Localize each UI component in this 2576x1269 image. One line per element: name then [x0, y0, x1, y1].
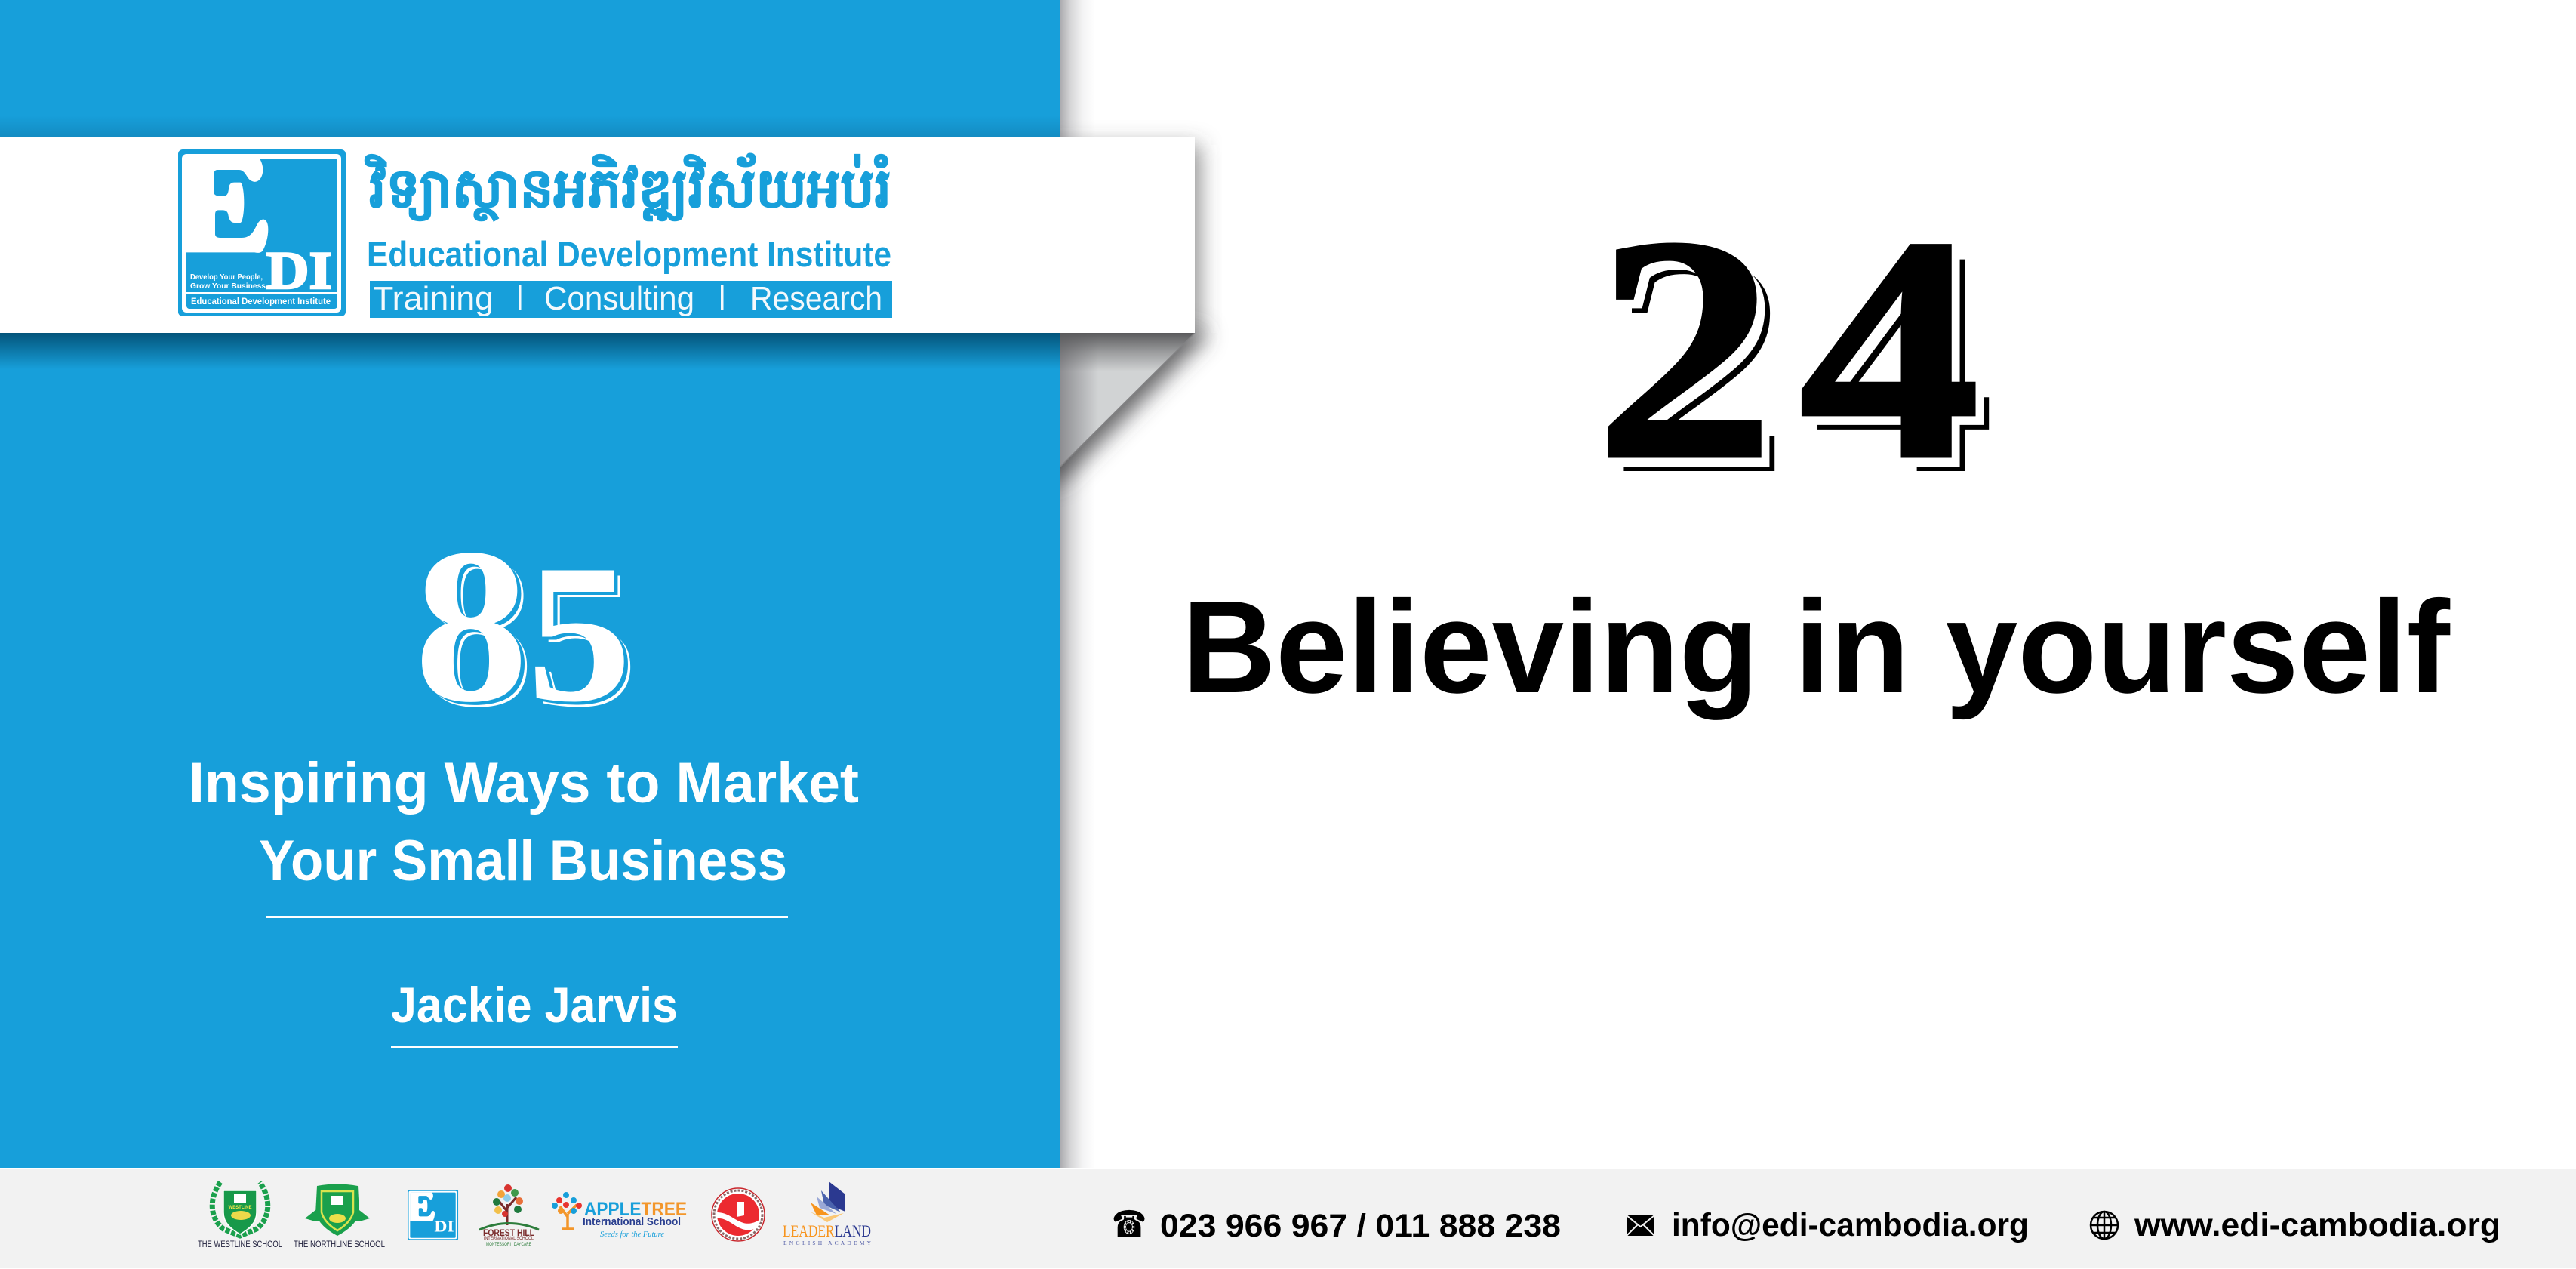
decorative numeral 24: 2 — [1594, 171, 1776, 527]
logo tagline — [190, 273, 266, 291]
logo: Appletree International School: Seeds for the Future — [600, 1230, 665, 1239]
band shadow below on blue — [0, 333, 1060, 369]
decorative numeral 85 — [414, 504, 632, 748]
logo: Leaderland English Academy: LEADERLAND — [783, 1221, 871, 1240]
folded corner — [1060, 333, 1195, 467]
services strip — [370, 280, 892, 318]
English institute name: Educational Development Institute — [367, 234, 891, 274]
logo: Forest Hill: MONTESSORI | DAYCARE — [486, 1243, 531, 1247]
logo: Forest Hill — [479, 1184, 539, 1247]
logo: Appletree International School: International School — [583, 1215, 681, 1228]
logo: red seal — [712, 1188, 765, 1241]
book subtitle: Inspiring Ways to Market — [189, 751, 859, 815]
services strip: Training — [373, 280, 494, 317]
logo: EDI mark — [178, 149, 346, 316]
phone numbers: 023 966 967 / 011 888 238 — [1160, 1208, 1561, 1244]
services strip: Research — [750, 280, 882, 317]
logo: Leaderland English Academy: ENGLISH ACADEMY — [783, 1240, 872, 1246]
logo tagline: Develop Your People, — [190, 273, 263, 282]
logo: Appletree International School: APPLETREE — [584, 1199, 687, 1220]
band shadow above on blue — [0, 116, 1060, 137]
Khmer institute name: វិទ្យាស្ថានអភិវឌ្ឍវិស័យអប់រំ — [365, 152, 891, 222]
logo: Appletree International School — [552, 1192, 687, 1239]
decorative numeral 24: 4 — [1798, 171, 1981, 527]
logo: Forest Hill: FOREST HILL — [483, 1227, 534, 1238]
panel: blue book cover — [0, 0, 1060, 1168]
panel shadow: right edge of blue panel — [1060, 0, 1095, 1168]
logo: EDI small: DI — [434, 1218, 454, 1236]
main heading: Believing in yourself — [1182, 573, 2451, 720]
decorative numeral 85: 8 — [414, 504, 528, 748]
logo name: Educational Development Institute — [191, 297, 331, 306]
email: info@edi-cambodia.org — [1672, 1207, 2029, 1243]
logo: The Northline School — [294, 1184, 385, 1249]
logo: The Westline School — [198, 1182, 282, 1249]
icon: globe — [2091, 1212, 2118, 1239]
icon: envelope — [1627, 1215, 1654, 1236]
logo: Forest Hill: INTERNATIONAL SCHOOL — [484, 1237, 534, 1241]
icon: white puzzle piece — [186, 159, 268, 253]
logo: The Northline School: THE NORTHLINE SCHOOL — [294, 1239, 385, 1249]
icon: telephone: ☎ — [1112, 1203, 1146, 1246]
logo: The Westline School: WESTLINE — [228, 1206, 252, 1210]
book subtitle — [189, 751, 859, 893]
logo: EDI small — [408, 1190, 458, 1240]
logo letters DI: DI — [266, 242, 332, 300]
logo: Leaderland English Academy — [783, 1181, 872, 1246]
panel: white logo band — [0, 137, 1195, 333]
logo: The Westline School: THE WESTLINE SCHOOL — [198, 1239, 282, 1249]
fold cast shadow — [981, 328, 1208, 483]
decorative numeral 85: 5 — [527, 524, 632, 743]
logo tagline: Grow Your Business — [190, 282, 266, 291]
book subtitle: Your Small Business — [259, 829, 787, 893]
footer bar — [0, 1169, 2576, 1268]
band shadow on white background — [981, 145, 1200, 333]
services strip: Consulting — [544, 280, 694, 317]
website: www.edi-cambodia.org — [2134, 1207, 2501, 1243]
decorative numeral 24 — [1594, 171, 1990, 527]
author: Jackie Jarvis — [391, 977, 678, 1033]
